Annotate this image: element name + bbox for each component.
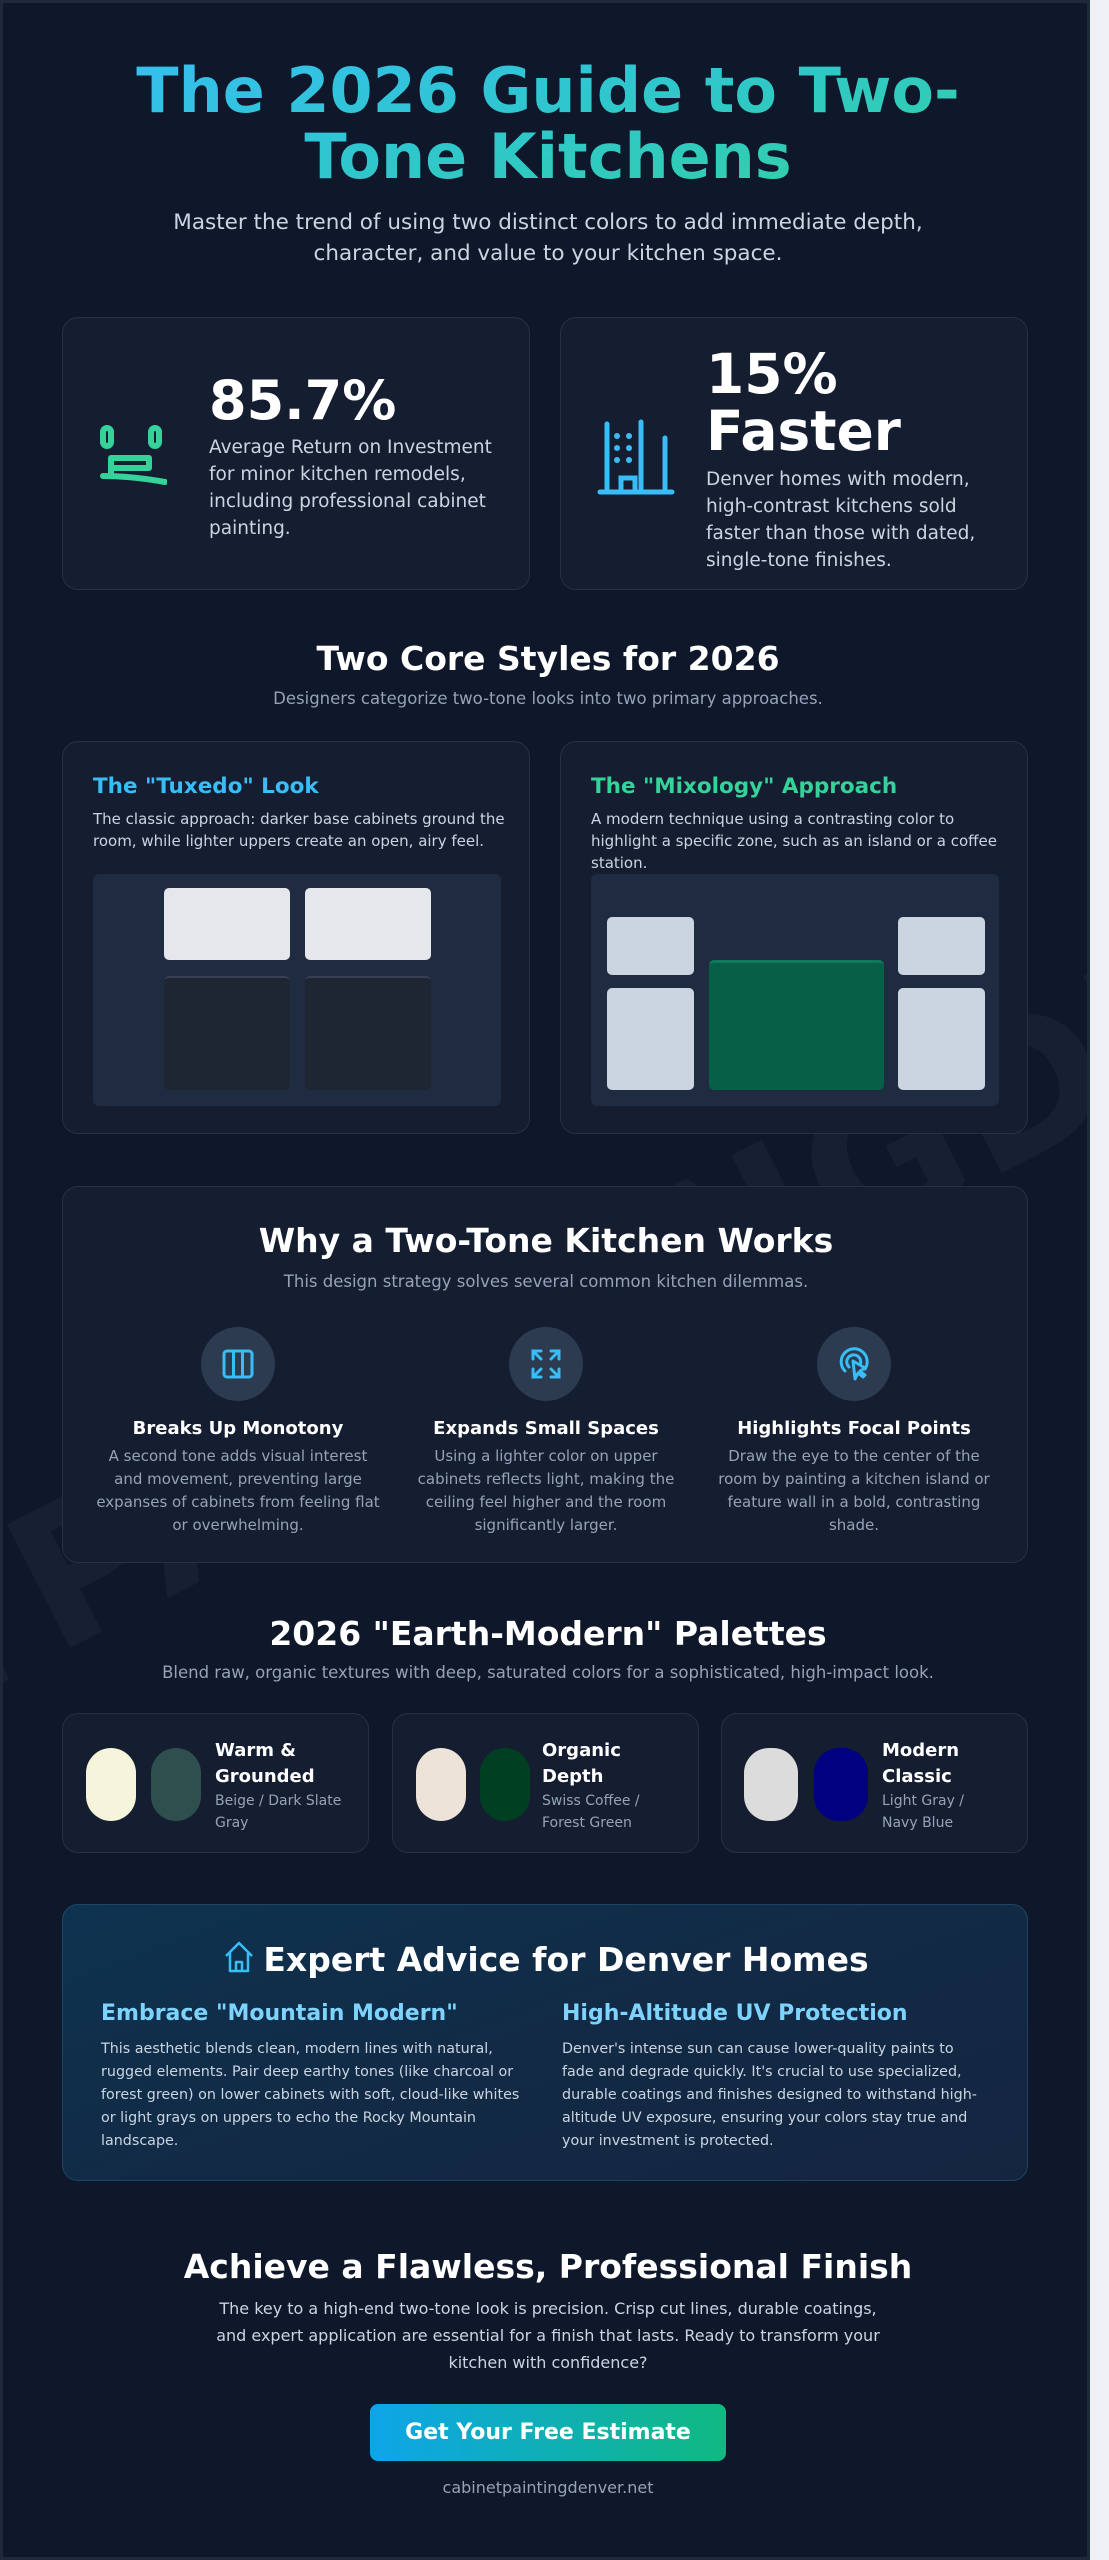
benefit: monotony: Breaks Up Monotony (133, 1418, 343, 1439)
illustration: mixology cabinets (591, 874, 999, 1106)
title: The 2026 Guide to Two- (136, 54, 960, 127)
cta text: The key to a high-end two-tone look is precision. Crisp cut lines, durable coatings, and expert application are essential for a finish that lasts. Ready to transform your kitchen with confidence? (216, 2299, 880, 2372)
panel: expert advice (62, 1904, 1028, 2181)
benefit: monotony (96, 1327, 380, 1534)
benefit: monotony: A second tone adds visual interest and movement, preventing large expanses of cabinets from feeling flat or overwhelming. (96, 1447, 380, 1534)
stat: 15% faster: 15% (706, 342, 838, 406)
benefit: spaces: Using a lighter color on upper cabinets reflects light, making the ceiling feel higher and the room significantly larger. (418, 1447, 674, 1534)
benefit: spaces (418, 1327, 674, 1534)
palette: warm & grounded: Beige / Dark Slate Gray (215, 1793, 341, 1831)
palette: modern classic: Modern Classic (882, 1740, 959, 1787)
heading: flawless finish: Achieve a Flawless, Professional Finish (184, 2247, 912, 2286)
icon: expand (509, 1327, 583, 1401)
advice: uv protection: High-Altitude UV Protection (562, 2001, 908, 2026)
benefit: focal points: Draw the eye to the center of the room by painting a kitchen island or feature wall in a bold, contrasting shade. (718, 1447, 990, 1534)
palette: modern classic (721, 1713, 1028, 1853)
icon: columns (201, 1327, 275, 1401)
panel subheading: This design strategy solves several common kitchen dilemmas. (284, 1272, 808, 1291)
title (3, 58, 1093, 190)
advice: uv protection: Denver's intense sun can cause lower-quality paints to fade and degrade quickly. It's crucial to use specialized, durable coatings and finishes designed to withstand high-altitude UV exposure, ensuring your colors stay true and your investment is protected. (562, 2041, 977, 2149)
button: estimate: Get Your Free Estimate (405, 2420, 691, 2445)
subheading: Designers categorize two-tone looks into two primary approaches. (273, 689, 823, 708)
advice: mountain modern: Embrace "Mountain Modern" (101, 2001, 458, 2026)
icon: paint roller (100, 425, 167, 485)
panel heading: Why a Two-Tone Kitchen Works (259, 1221, 833, 1260)
benefit: focal points (718, 1327, 990, 1534)
stat card: ROI (62, 317, 530, 590)
stat: 85.7%: Average Return on Investment for minor kitchen remodels, including professional cabinet painting. (209, 437, 492, 539)
palette: organic depth: Swiss Coffee / Forest Green (542, 1793, 640, 1831)
card title: The "Tuxedo" Look (93, 774, 319, 799)
card text: A modern technique using a contrasting color to highlight a specific zone, such as an island or a coffee station. (591, 810, 997, 872)
panel heading with house icon: Expert Advice for Denver Homes (263, 1940, 869, 1979)
illustration: tuxedo cabinets (93, 874, 501, 1106)
palette: warm & grounded: Warm & Grounded (215, 1740, 315, 1787)
subtitle: Master the trend of using two distinct colors to add immediate depth, character, and value to your kitchen space. (173, 210, 923, 266)
panel: mixology (560, 741, 1028, 1134)
stat: 85.7%: 85.7% (209, 369, 396, 432)
benefit: spaces: Expands Small Spaces (433, 1418, 659, 1439)
stat: 15% faster: Denver homes with modern, high-contrast kitchens sold faster than those with dated, single-tone finishes. (706, 469, 975, 571)
stat card: faster (560, 317, 1028, 590)
panel: tuxedo (62, 741, 530, 1134)
card title: The "Mixology" Approach (591, 774, 897, 799)
panel: why two-tone works (62, 1186, 1028, 1563)
palette: modern classic: Light Gray / Navy Blue (882, 1793, 964, 1831)
advice: mountain modern: This aesthetic blends clean, modern lines with natural, rugged elements. Pair deep earthy tones (like charcoal or forest green) on lower cabinets with soft, cloud-like whites or light grays on uppers to echo the Rocky Mountain landscape. (101, 2041, 519, 2149)
icon: pointer (817, 1327, 891, 1401)
palette: organic depth (392, 1713, 699, 1853)
palette: organic depth: Organic Depth (542, 1740, 621, 1787)
title: Tone Kitchens (304, 120, 792, 193)
benefit: focal points: Highlights Focal Points (737, 1418, 971, 1439)
palette: warm & grounded (62, 1713, 369, 1853)
heading: palettes: 2026 "Earth-Modern" Palettes (269, 1614, 827, 1653)
stat: 15% faster (706, 342, 975, 571)
button: estimate (370, 2404, 726, 2461)
stat: 15% faster: Faster (706, 399, 901, 463)
subheading: Blend raw, organic textures with deep, saturated colors for a sophisticated, high-impact look. (162, 1663, 934, 1682)
card text: The classic approach: darker base cabinets ground the room, while lighter uppers create an open, airy feel. (93, 810, 505, 850)
stat: 85.7% (209, 369, 492, 539)
icon: building (598, 420, 674, 494)
footer url: cabinetpaintingdenver.net (443, 2478, 653, 2497)
heading: two core styles: Two Core Styles for 2026 (316, 639, 780, 678)
